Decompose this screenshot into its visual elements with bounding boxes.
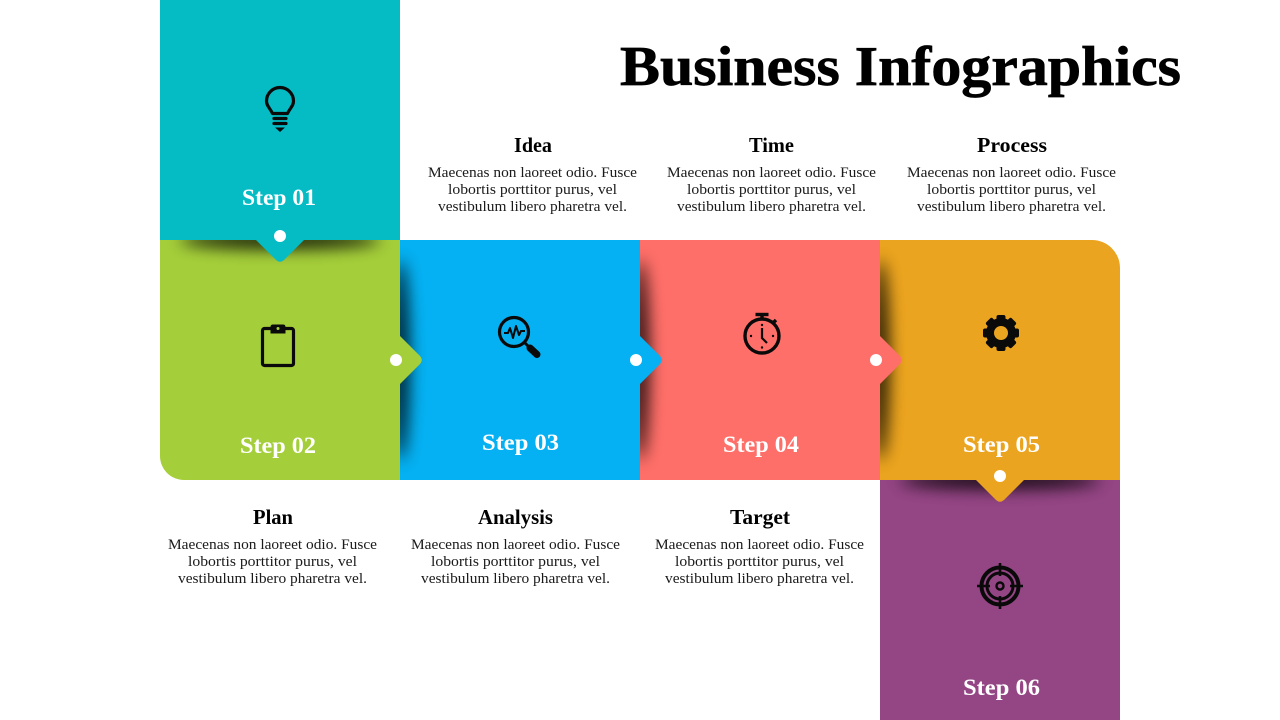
shadow: below step 05	[900, 471, 1100, 489]
connector: step 01 to 02	[256, 230, 304, 262]
text block: Time: Time	[749, 133, 794, 157]
text block: Idea: Idea	[514, 133, 552, 157]
text block: Idea: lobortis porttitor purus, vel	[448, 182, 617, 198]
panel: step 02: Step 02	[240, 433, 316, 458]
icon: magnifier with pulse	[500, 318, 537, 354]
text block: Process: Maecenas non laoreet odio. Fusce	[907, 165, 1116, 181]
text block: Idea	[428, 133, 637, 215]
title: Business Infographics	[620, 36, 1181, 98]
panel: step 05: Step 05	[963, 432, 1040, 457]
text block: Idea: Maecenas non laoreet odio. Fusce	[428, 165, 637, 181]
icon: stopwatch	[745, 314, 779, 353]
icon: target	[977, 563, 1023, 609]
text block: Process: lobortis porttitor purus, vel	[927, 182, 1096, 198]
text block: Target: lobortis porttitor purus, vel	[675, 554, 844, 570]
text block: Plan: lobortis porttitor purus, vel	[188, 554, 357, 570]
icon: gear	[983, 315, 1019, 351]
text block: Process: Process	[977, 133, 1047, 157]
text block: Analysis: lobortis porttitor purus, vel	[431, 554, 600, 570]
shadow: right of step 02	[391, 260, 409, 460]
text block: Target: vestibulum libero pharetra vel.	[665, 571, 854, 587]
text block: Plan	[168, 505, 377, 587]
icon: clipboard	[262, 325, 294, 366]
shadow: right of step 04	[871, 260, 889, 460]
panel: step 05	[880, 240, 1120, 480]
panel: step 01: Step 01	[242, 185, 316, 210]
text block: Plan: Maecenas non laoreet odio. Fusce	[168, 537, 377, 553]
connector: step 05 to 06	[976, 470, 1024, 502]
text block: Plan: vestibulum libero pharetra vel.	[178, 571, 367, 587]
text block: Target	[655, 505, 864, 587]
text block: Target: Maecenas non laoreet odio. Fusce	[655, 537, 864, 553]
connector: step 03 to 04	[630, 336, 662, 384]
text block: Process: vestibulum libero pharetra vel.	[917, 199, 1106, 215]
text block: Process	[907, 133, 1116, 215]
text block: Time: Maecenas non laoreet odio. Fusce	[667, 165, 876, 181]
text block: Target: Target	[730, 505, 790, 529]
text block: Analysis	[411, 505, 620, 587]
text block: Analysis: Analysis	[478, 505, 553, 529]
connector: step 04 to 05	[870, 336, 902, 384]
shadow: right of step 03	[631, 260, 649, 460]
text block: Analysis: Maecenas non laoreet odio. Fusce	[411, 537, 620, 553]
panel: step 04: Step 04	[723, 432, 800, 457]
text block: Idea: vestibulum libero pharetra vel.	[438, 199, 627, 215]
panel: step 06: Step 06	[963, 675, 1040, 700]
text block: Time: vestibulum libero pharetra vel.	[677, 199, 866, 215]
panel: step 03	[400, 240, 640, 480]
text block: Analysis: vestibulum libero pharetra vel.	[421, 571, 610, 587]
panel: step 02	[160, 240, 400, 480]
panel: step 04	[640, 240, 880, 480]
text block: Plan: Plan	[253, 505, 293, 529]
panel: step 01	[160, 0, 400, 240]
panel: step 03: Step 03	[482, 430, 559, 455]
text block: Time	[667, 133, 876, 215]
text block: Time: lobortis porttitor purus, vel	[687, 182, 856, 198]
connector: step 02 to 03	[390, 336, 422, 384]
icon: light bulb	[266, 88, 294, 132]
shadow: below step 01	[180, 231, 380, 249]
panel: step 06	[880, 480, 1120, 720]
